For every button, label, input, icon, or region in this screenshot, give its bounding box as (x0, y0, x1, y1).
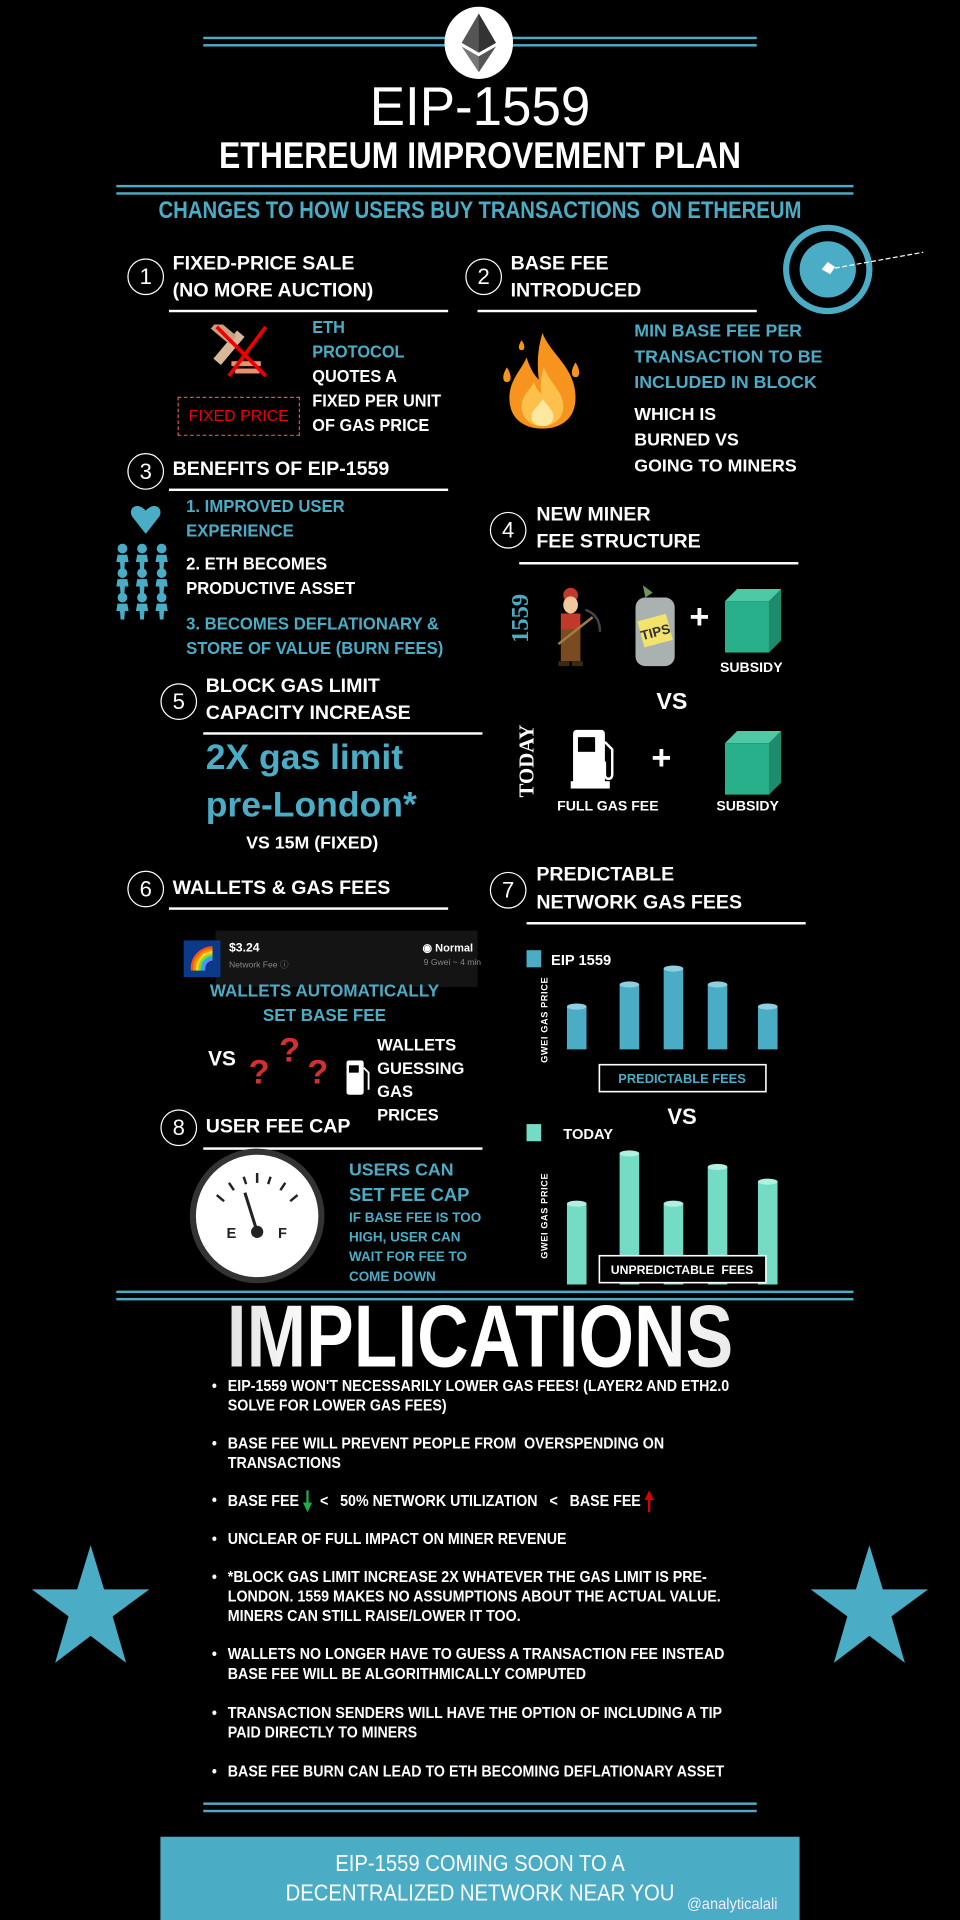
icon: small gas pump (346, 1060, 370, 1095)
implications list: • (212, 1646, 217, 1663)
panel 5: block gas limit: 5 (173, 689, 185, 714)
implications list: WALLETS NO LONGER HAVE TO GUESS A TRANSACTION FEE INSTEAD (228, 1646, 724, 1663)
footer banner: EIP-1559 COMING SOON TO A (335, 1851, 625, 1877)
vs: VS (656, 689, 687, 715)
icon: target (783, 224, 924, 314)
text: benefits list: 1. IMPROVED USER (186, 497, 345, 517)
text: vs 15m: VS 15M (FIXED) (246, 834, 378, 853)
wallet screenshot: $3.24 (229, 942, 260, 955)
icon: ethereum logo (444, 6, 514, 79)
text: min base fee (634, 322, 822, 476)
panel 6: wallets: WALLETS & GAS FEES (173, 878, 390, 899)
text: wallets guessing: GAS (377, 1082, 413, 1101)
vs: VS (208, 1047, 236, 1070)
implications list: LONDON. 1559 MAKES NO ASSUMPTIONS ABOUT THE ACTUAL VALUE. (228, 1588, 721, 1605)
implications list: • (212, 1704, 217, 1722)
panel 7: predictable network gas fees: 7 (502, 878, 514, 902)
icon: miner (558, 588, 602, 666)
text: min base fee: INCLUDED IN BLOCK (634, 373, 817, 393)
panel 1: fixed price sale: 1 (140, 264, 152, 289)
text: users can set fee cap: USERS CAN (349, 1161, 454, 1180)
panel 2: base fee (465, 253, 757, 312)
icon: question marks: ? (249, 1053, 270, 1091)
title: EIP-1559 (370, 75, 590, 137)
footer banner (160, 1837, 800, 1920)
panel 2: base fee: 2 (478, 264, 490, 289)
implications list: BASE FEE BURN CAN LEAD TO ETH BECOMING DEFLATIONARY ASSET (228, 1763, 724, 1780)
text: users can set fee cap: COME DOWN (349, 1270, 436, 1284)
chart: eip 1559 bars: GWEI GAS PRICE (539, 977, 549, 1063)
panel 5: block gas limit: BLOCK GAS LIMIT (206, 676, 380, 697)
panel 7: predictable network gas fees: PREDICTABLE (536, 864, 674, 885)
chart: eip 1559 bars: PREDICTABLE FEES (618, 1071, 746, 1086)
text: min base fee: TRANSACTION TO BE (634, 348, 822, 367)
panel 7: predictable network gas fees: NETWORK GAS FEES (536, 893, 742, 913)
text: eth protocol: PROTOCOL (312, 343, 405, 362)
panel 1: fixed price sale: (NO MORE AUCTION) (173, 280, 373, 301)
panel 7: predictable network gas fees (490, 864, 806, 924)
panel 4: new miner fee structure (490, 504, 798, 564)
implications list (212, 1378, 729, 1780)
heading: implications: IMPLICATIONS (227, 1288, 733, 1386)
implications list: • (212, 1569, 217, 1586)
panel 4: new miner fee structure: FEE STRUCTURE (536, 531, 701, 552)
text: users can set fee cap: WAIT FOR FEE TO (349, 1250, 467, 1265)
text: wallets guessing: GUESSING (377, 1059, 464, 1078)
implications list: MINERS CAN STILL RAISE/LOWER IT TOO. (228, 1608, 521, 1625)
text: users can set fee cap: HIGH, USER CAN (349, 1231, 460, 1245)
panel 3: benefits: 3 (140, 459, 152, 484)
text: min base fee: BURNED VS (634, 431, 739, 451)
text: min base fee: WHICH IS (634, 406, 716, 425)
icon: gas pump (570, 730, 614, 789)
text: min base fee: GOING TO MINERS (634, 457, 797, 476)
divider lines (116, 184, 854, 195)
implications list: • (212, 1763, 217, 1780)
wallet screenshot: 🌈 (188, 947, 216, 971)
fixed price box: FIXED PRICE (189, 407, 289, 425)
text: eth protocol: FIXED PER UNIT (312, 392, 441, 411)
panel 5: block gas limit (160, 676, 482, 735)
text: wallets automatically: SET BASE FEE (263, 1007, 386, 1026)
panel 4: new miner fee structure: NEW MINER (536, 504, 651, 525)
divider lines (116, 1290, 854, 1300)
implications list: *BLOCK GAS LIMIT INCREASE 2X WHATEVER THE GAS LIMIT IS PRE- (228, 1569, 707, 1586)
implications list: TRANSACTION SENDERS WILL HAVE THE OPTION OF INCLUDING A TIP (228, 1704, 722, 1722)
labels: full gas fee / subsidy: SUBSIDY (716, 800, 779, 814)
wallet screenshot: 9 Gwei ~ 4 min (424, 959, 481, 967)
chart: today bars: TODAY (563, 1127, 613, 1143)
header lines (203, 36, 757, 47)
icon: fuel gauge: F (278, 1226, 287, 1242)
icon: question marks: ? (307, 1053, 328, 1091)
implications list: SOLVE FOR LOWER GAS FEES) (228, 1397, 447, 1414)
panel 2: base fee: INTRODUCED (511, 280, 641, 301)
panel 8: user fee cap: 8 (173, 1116, 185, 1140)
text: wallets automatically: WALLETS AUTOMATICALLY (210, 982, 439, 1002)
wallet screenshot (184, 930, 481, 987)
implications list: • (212, 1435, 217, 1452)
panel 6: wallets (127, 870, 448, 910)
plus: + (689, 598, 709, 636)
text: eth protocol: QUOTES A (312, 367, 397, 387)
panel 8: user fee cap (160, 1109, 482, 1150)
text: benefits list: PRODUCTIVE ASSET (186, 579, 355, 599)
text: users can set fee cap: IF BASE FEE IS TOO (349, 1211, 481, 1226)
text: users can set fee cap (349, 1161, 481, 1284)
implications list: BASE FEE WILL PREVENT PEOPLE FROM OVERSPENDING ON (228, 1435, 664, 1452)
labels: full gas fee / subsidy (557, 800, 779, 814)
text: benefits list: STORE OF VALUE (BURN FEES) (186, 639, 443, 659)
footer banner: @analyticalali (687, 1894, 778, 1913)
labels: full gas fee / subsidy: FULL GAS FEE (557, 800, 659, 814)
text: eth protocol: ETH (312, 318, 345, 338)
text: 2x gas limit (206, 738, 417, 825)
text: 2x gas limit: 2X gas limit (206, 738, 403, 778)
icon: star left (32, 1546, 150, 1663)
panel 1: fixed price sale (127, 253, 448, 312)
icon: question marks: ? (279, 1031, 300, 1069)
implications list: BASE FEE < 50% NETWORK UTILIZATION < BASE FEE (228, 1493, 641, 1510)
text: wallets automatically (210, 982, 439, 1026)
chart: eip 1559 bars: EIP 1559 (551, 953, 611, 969)
text: min base fee: MIN BASE FEE PER (634, 322, 802, 342)
label: 1559 vertical: 1559 (507, 594, 534, 643)
icon: crossed gavel (210, 324, 268, 378)
implications list: BASE FEE WILL BE ALGORITHMICALLY COMPUTED (228, 1665, 586, 1682)
text: eth protocol: OF GAS PRICE (312, 416, 429, 436)
chart: today bars: UNPREDICTABLE FEES (611, 1263, 753, 1277)
heading: changes: CHANGES TO HOW USERS BUY TRANSACTIONS ON ETHEREUM (159, 197, 801, 224)
text: wallets guessing: WALLETS (377, 1036, 456, 1054)
icon: question marks (249, 1031, 328, 1091)
text: benefits list: 2. ETH BECOMES (186, 555, 327, 574)
implications list: • (212, 1491, 217, 1509)
panel 6: wallets: 6 (140, 877, 152, 901)
icon: flame (503, 333, 580, 429)
icon: tip jar (636, 585, 675, 666)
icon: star right (810, 1546, 928, 1663)
text: eth protocol (312, 318, 441, 436)
plus: + (651, 738, 671, 776)
panel 3: benefits: BENEFITS OF EIP-1559 (173, 459, 389, 480)
wallet screenshot: Network Fee ⓘ (229, 961, 289, 970)
subtitle: ethereum improvement plan: ETHEREUM IMPROVEMENT PLAN (219, 136, 741, 176)
implications list: UNCLEAR OF FULL IMPACT ON MINER REVENUE (228, 1531, 567, 1548)
implications list: • (212, 1531, 217, 1548)
icon: fuel gauge: E (227, 1226, 237, 1242)
vs: VS (667, 1104, 697, 1129)
icon: fuel gauge (190, 1148, 324, 1284)
wallet screenshot: ◉ Normal (422, 942, 473, 954)
footer banner: DECENTRALIZED NETWORK NEAR YOU (286, 1881, 674, 1907)
panel 5: block gas limit: CAPACITY INCREASE (206, 703, 411, 724)
panel 4: new miner fee structure: 4 (502, 518, 514, 542)
implications list: • (212, 1378, 217, 1395)
text: users can set fee cap: SET FEE CAP (349, 1185, 469, 1206)
panel 2: base fee: BASE FEE (511, 253, 609, 274)
panel 1: fixed price sale: FIXED-PRICE SALE (173, 253, 354, 274)
fixed price box (178, 397, 300, 436)
implications list: TRANSACTIONS (228, 1455, 341, 1472)
text: benefits list (186, 497, 443, 659)
text: wallets guessing: PRICES (377, 1106, 439, 1124)
implications list: EIP-1559 WON'T NECESSARILY LOWER GAS FEES! (LAYER2 AND ETH2.0 (228, 1378, 729, 1395)
text: benefits list: 3. BECOMES DEFLATIONARY & (186, 615, 439, 634)
chart: today bars (526, 1124, 778, 1284)
chart: eip 1559 bars (526, 950, 778, 1092)
text: wallets guessing (377, 1036, 464, 1124)
icon: tip jar: TIPS (639, 621, 672, 643)
label: subsidy: SUBSIDY (720, 661, 783, 676)
icon: people grid (116, 544, 168, 620)
icon: heart (130, 506, 160, 534)
divider lines (203, 1802, 757, 1812)
heading: implications (91, 1293, 869, 1381)
panel 8: user fee cap: USER FEE CAP (206, 1117, 351, 1138)
label: today vertical: TODAY (515, 725, 538, 797)
chart: today bars: GWEI GAS PRICE (539, 1173, 549, 1259)
text: benefits list: EXPERIENCE (186, 522, 294, 541)
text: 2x gas limit: pre-London* (206, 786, 417, 825)
icon: cube subsidy (725, 589, 782, 653)
panel 3: benefits (127, 453, 448, 492)
icon: cube subsidy 2 (725, 731, 782, 795)
implications list: PAID DIRECTLY TO MINERS (228, 1724, 417, 1741)
